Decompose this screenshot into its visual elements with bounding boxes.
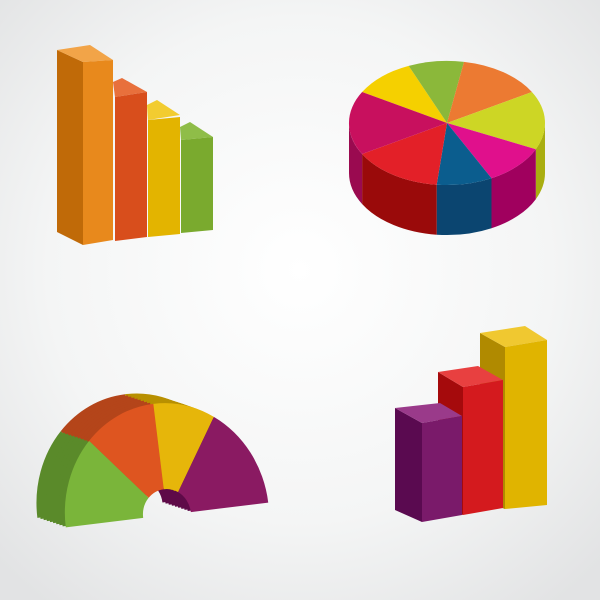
bar: green	[180, 122, 213, 233]
pie top slices	[349, 61, 545, 185]
gauge extrusion	[24, 379, 265, 529]
gauge chart	[24, 379, 268, 531]
bar: yellow tall	[480, 326, 547, 509]
bar: purple	[395, 403, 462, 522]
bar: red-orange	[113, 78, 147, 241]
bar: orange	[57, 45, 113, 245]
pie sides	[349, 123, 545, 235]
bar chart: ascending bars	[395, 326, 547, 522]
bar: yellow	[147, 100, 180, 237]
pie chart	[349, 61, 545, 235]
gauge front segments	[52, 391, 268, 527]
bar chart: descending bars	[57, 45, 213, 245]
bar: red	[438, 366, 503, 515]
